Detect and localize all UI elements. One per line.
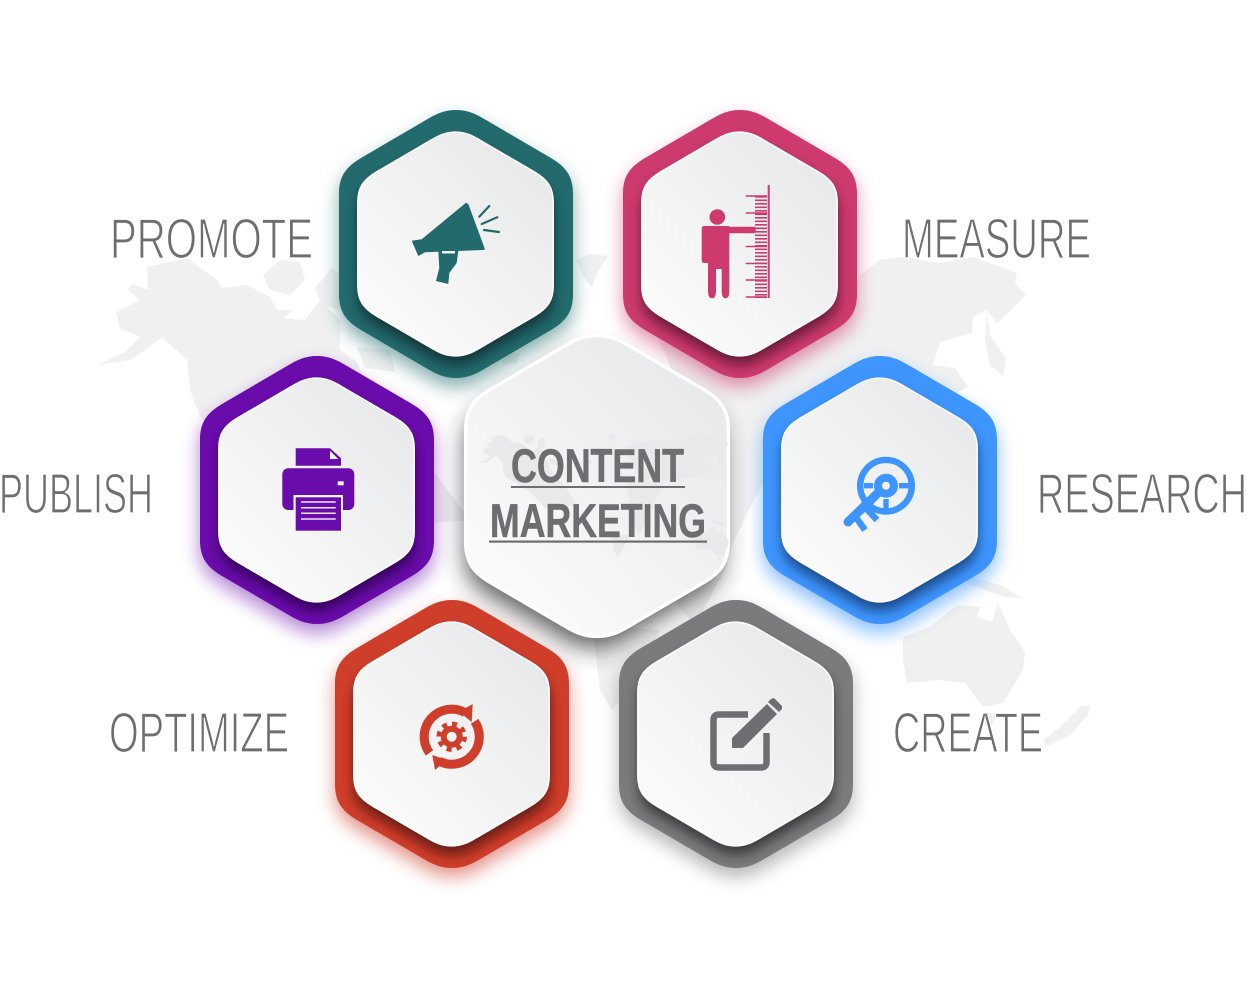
hexagon frame: publish <box>200 356 434 633</box>
hexagon frame: research <box>763 356 997 633</box>
label: publish: PUBLISH <box>0 462 153 526</box>
panel: research <box>763 356 1247 633</box>
hexagon frame: optimize <box>335 600 569 877</box>
hexagon frame: measure <box>623 110 857 387</box>
center hexagon shape <box>465 336 728 648</box>
title: content marketing: CONTENT <box>511 439 684 492</box>
icon: person measuring <box>702 185 770 298</box>
label: optimize: OPTIMIZE <box>109 701 289 765</box>
hexagon frame: promote <box>339 110 573 387</box>
panel: create <box>619 600 1043 877</box>
panel: optimize <box>109 600 569 877</box>
hexagon frame: create <box>619 600 853 877</box>
background world map <box>98 254 1090 745</box>
icon: pencil and square <box>714 698 782 768</box>
icon: gear with arrows <box>424 704 479 770</box>
title: content marketing <box>489 439 707 547</box>
label: measure: MEASURE <box>902 207 1091 271</box>
icon: printer <box>282 448 354 531</box>
label: create: CREATE <box>893 701 1043 765</box>
panel: measure <box>623 110 1091 387</box>
mini world map <box>480 435 728 556</box>
icon: megaphone <box>412 203 499 284</box>
panel: center hexagon <box>465 336 746 648</box>
label: promote: PROMOTE <box>110 207 313 271</box>
panel: publish <box>0 356 434 633</box>
title: content marketing: MARKETING <box>490 494 706 547</box>
panel: promote <box>110 110 573 387</box>
icon: key and target <box>848 460 912 530</box>
